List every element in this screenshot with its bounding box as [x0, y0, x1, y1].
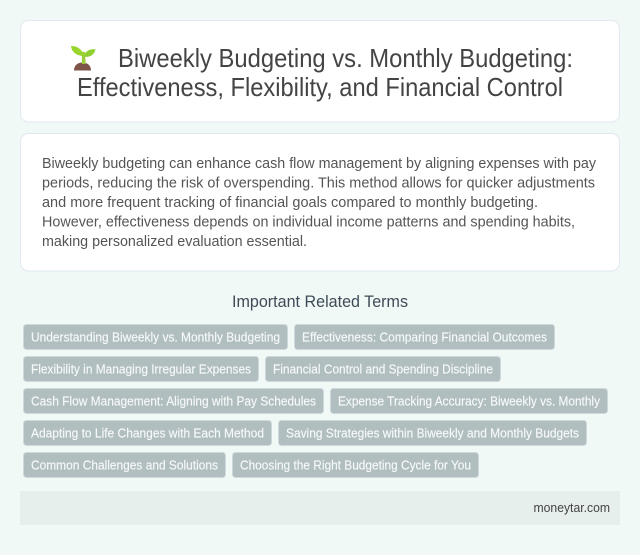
tag: [278, 420, 586, 446]
tag: [24, 420, 272, 446]
tag: Effectiveness: Comparing Financial Outcomes: [302, 330, 547, 344]
heading: important related terms: Important Related Terms: [232, 293, 408, 311]
title: Effectiveness, Flexibility, and Financial Control: [77, 74, 563, 102]
footer: [20, 491, 620, 525]
tag: Saving Strategies within Biweekly and Monthly Budgets: [286, 426, 579, 440]
tag: Common Challenges and Solutions: [31, 458, 218, 472]
tag: [294, 324, 554, 350]
panel: summary text: Biweekly budgeting can enhance cash flow management by aligning expenses with pay: [42, 155, 596, 172]
panel: title card: [20, 20, 620, 122]
footer: moneytar.com: [534, 500, 610, 515]
tag: Expense Tracking Accuracy: Biweekly vs. Monthly: [338, 394, 601, 408]
panel: summary text: However, effectiveness depends on individual income patterns and spending habits,: [42, 214, 575, 230]
tag: [232, 452, 478, 478]
tag: Understanding Biweekly vs. Monthly Budgeting: [31, 330, 280, 344]
tag: Financial Control and Spending Discipline: [273, 362, 493, 376]
panel: summary text: making personalized evaluation essential.: [42, 233, 307, 250]
tag: Flexibility in Managing Irregular Expenses: [31, 362, 251, 376]
tag: Cash Flow Management: Aligning with Pay Schedules: [31, 394, 316, 408]
tag: Adapting to Life Changes with Each Method: [31, 426, 264, 440]
tag: [24, 324, 288, 350]
title: Biweekly Budgeting vs. Monthly Budgeting:: [118, 45, 573, 73]
tag: [24, 452, 226, 478]
tag: [266, 356, 500, 382]
panel: summary text: [20, 134, 620, 271]
icon: sprout: [71, 46, 96, 70]
panel: summary text: periods, reducing the risk of overspending. This method allows for quicker adjustments: [42, 174, 595, 192]
panel: summary text: and more frequent tracking of financial goals compared to monthly budgeting.: [42, 194, 538, 211]
title: [77, 45, 573, 102]
tag: [330, 388, 608, 414]
panel: related term tags: [24, 324, 608, 478]
tag: [24, 356, 258, 382]
tag: Choosing the Right Budgeting Cycle for You: [240, 458, 471, 472]
tag: [24, 388, 324, 414]
